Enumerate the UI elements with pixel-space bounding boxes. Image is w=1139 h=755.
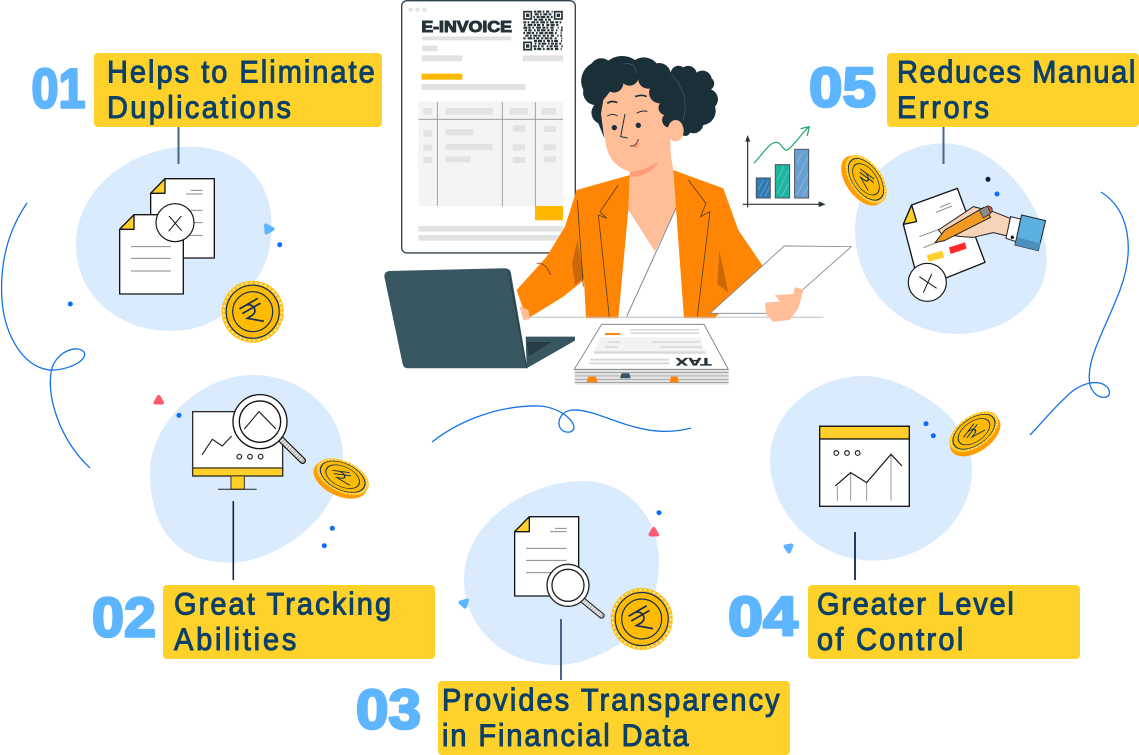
hair (581, 56, 718, 138)
invoice form lines (422, 36, 563, 90)
paper, table edge and hands (519, 246, 851, 322)
number 01: 01 (32, 56, 86, 120)
facial features (607, 95, 647, 146)
invoice table (418, 102, 563, 206)
illustration: e-invoice document (402, 1, 575, 253)
icon: rupee coin (222, 281, 284, 343)
icon: browser window chart (820, 426, 909, 506)
blob 05 (855, 143, 1047, 334)
label: great tracking abilities: Great Tracking (174, 587, 391, 622)
icon: tilted rupee coin (941, 403, 1008, 465)
number 04: 04 (728, 584, 798, 648)
label: greater level of control (808, 585, 1080, 659)
blob 04 (770, 376, 972, 561)
head (581, 56, 718, 177)
neck, shirt and blazer (517, 157, 763, 319)
number 02: 02 (92, 586, 156, 648)
panel: step 05 manual errors (809, 53, 1139, 334)
label: reduces manual errors: Reduces Manual (897, 55, 1135, 90)
illustration: bar chart with trend arrow (743, 127, 826, 207)
label: reduces manual errors: Errors (897, 91, 989, 125)
label: great tracking abilities (163, 585, 435, 659)
icon: monitor with magnifier (193, 395, 303, 489)
label: provides transparency in financial data: in Financial Data (442, 719, 689, 753)
number 05: 05 (809, 56, 876, 118)
panel: step 03 transparency (356, 481, 790, 755)
label: greater level of control: Greater Level (817, 587, 1014, 622)
connector line (854, 532, 856, 580)
icon: duplicate documents (120, 179, 214, 294)
connector line (232, 501, 234, 580)
invoice heading: E-INVOICE (421, 19, 512, 36)
decorative curve: right (1030, 192, 1128, 435)
label: greater level of control: of Control (817, 623, 963, 657)
tax heading, upside down: TAX (674, 355, 712, 367)
decorative dots and triangles (68, 177, 1000, 607)
panel: step 04 control (728, 376, 1080, 659)
label: reduces manual errors (887, 53, 1139, 127)
decorative curve: left (2, 203, 90, 468)
icon: rupee coin (611, 588, 673, 650)
decorative curve: center (432, 406, 691, 442)
label: helps to eliminate duplications: Helps to Eliminate (107, 55, 375, 90)
panel: step 02 tracking abilities (92, 375, 435, 659)
illustration: laptop (384, 268, 575, 368)
icon: tilted rupee coin (308, 450, 375, 507)
connector line (560, 619, 562, 680)
label: great tracking abilities: Abilities (174, 623, 296, 657)
number 03: 03 (356, 678, 421, 740)
blob 02 (150, 375, 343, 563)
icon: document with magnifier (515, 517, 602, 616)
icon: hand correcting document (903, 188, 1046, 301)
blob 03 (464, 481, 659, 665)
blob 01 (76, 147, 272, 331)
icon: tilted rupee coin (832, 146, 895, 214)
illustration: tax document stack (574, 324, 729, 385)
connector line (942, 127, 944, 164)
connector line (178, 127, 180, 164)
label: provides transparency in financial data (438, 681, 790, 755)
label: provides transparency in financial data: Provides Transparency (442, 683, 780, 718)
ear (668, 120, 684, 141)
icon: QR code (523, 12, 563, 50)
illustration: woman in orange blazer (517, 56, 851, 322)
label: helps to eliminate duplications (94, 53, 382, 127)
label: helps to eliminate duplications: Duplications (107, 91, 291, 125)
panel: step 01 eliminate duplications (32, 53, 382, 343)
